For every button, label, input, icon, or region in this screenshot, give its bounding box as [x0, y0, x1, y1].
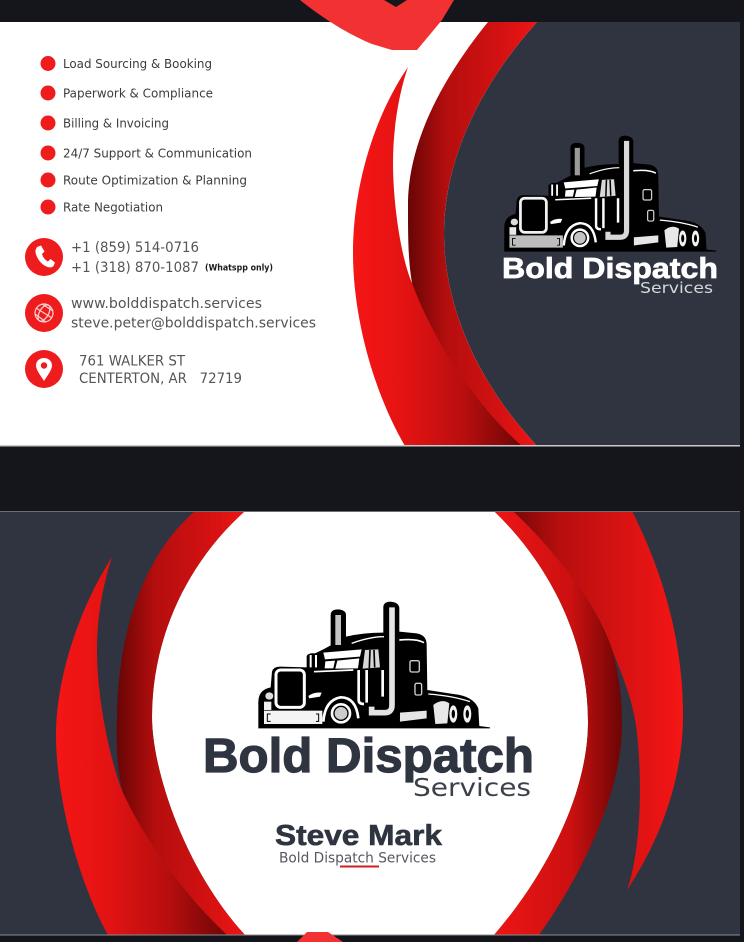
right back band [494, 511, 622, 935]
contact: web and email [71, 296, 316, 332]
icon: phone [25, 238, 63, 276]
red shape cropped at top [300, 0, 454, 50]
company subtitle: Bold Dispatch Services [279, 850, 436, 866]
dark panel right [444, 22, 740, 446]
contact: web and email: www.bolddispatch.services [71, 296, 262, 312]
name: Steve Mark: Steve Mark [275, 820, 443, 852]
icon: globe [25, 294, 63, 332]
logo: truck on dark [504, 136, 716, 252]
contact: phone numbers: (Whatspp only) [205, 264, 273, 274]
service list [40, 56, 252, 214]
contact: address: 761 WALKER ST [79, 354, 185, 370]
right front crescent [513, 511, 683, 890]
panel: top card [0, 22, 740, 446]
red back band [408, 22, 537, 446]
bullet: paperwork: Paperwork & Compliance [63, 86, 213, 100]
icon: location pin [25, 350, 63, 388]
logo: truck on white [258, 602, 490, 728]
red underline [340, 866, 379, 868]
panel: bottom card [0, 511, 740, 936]
white circle [152, 511, 588, 935]
contact: address: CENTERTON, AR 72719 [79, 371, 242, 387]
logo text on dark [502, 253, 718, 297]
bullet: load sourcing: Load Sourcing & Booking [63, 56, 212, 71]
contact: phone numbers [71, 240, 273, 276]
logo text on white: Bold Dispatch [203, 729, 534, 783]
logo text on white: Services [413, 773, 531, 802]
left front crescent [56, 557, 227, 935]
contact: phone numbers: +1 (318) 870-1087 [71, 260, 199, 276]
red front crescent [353, 67, 522, 446]
contact: web and email: steve.peter@bolddispatch.services [71, 316, 316, 332]
red shape cropped at bottom [297, 932, 343, 942]
left back band [117, 511, 245, 935]
logo text on dark: Bold Dispatch [502, 253, 718, 285]
bullet: billing: Billing & Invoicing [63, 116, 169, 130]
bullet: support: 24/7 Support & Communication [63, 146, 252, 160]
contact: phone numbers: +1 (859) 514-0716 [71, 240, 199, 256]
bullet: rate: Rate Negotiation [63, 200, 163, 214]
logo text on dark: Services [640, 279, 713, 297]
contact: address [79, 354, 242, 387]
bullet: route: Route Optimization & Planning [63, 172, 247, 188]
